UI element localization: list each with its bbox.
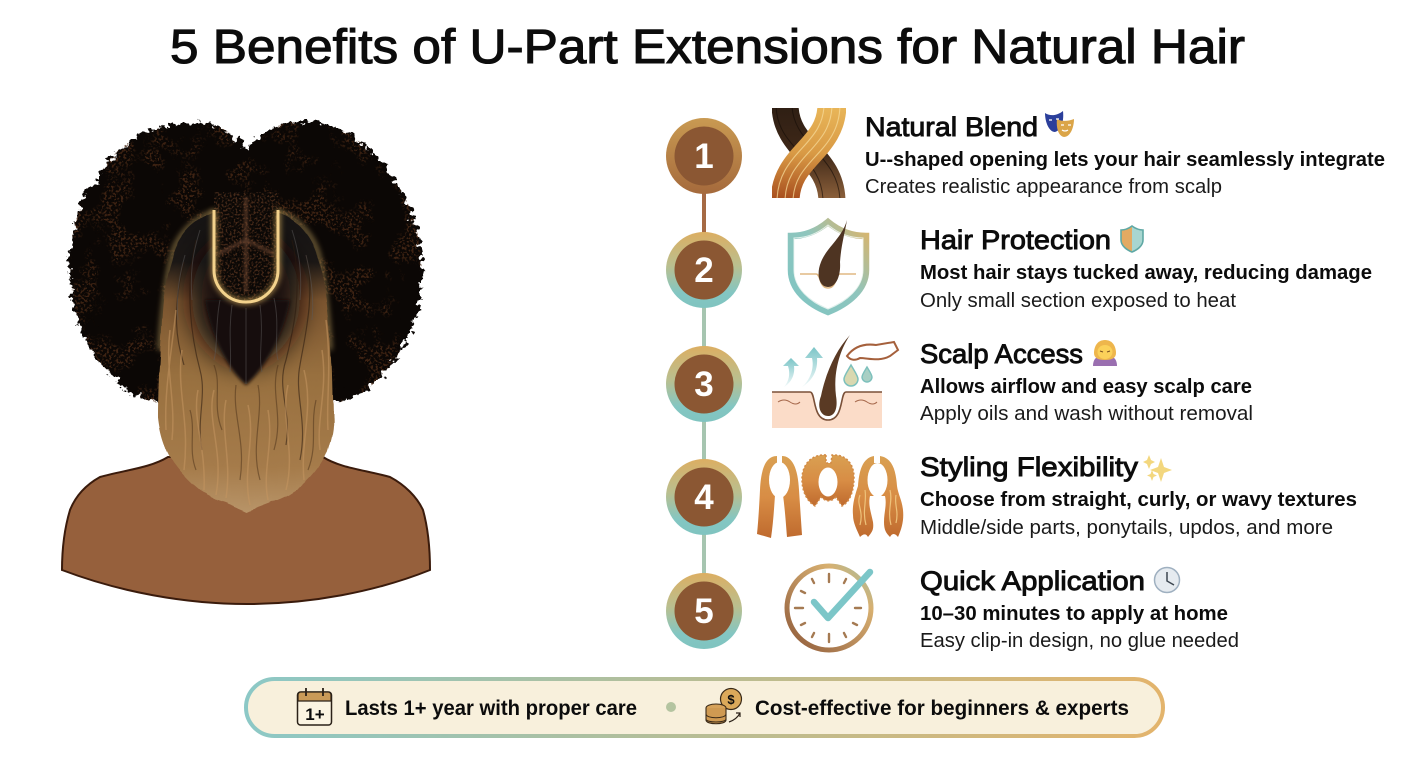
heading block 1: Natural Blend — [865, 112, 1038, 142]
icon: sparkles emoji — [1143, 455, 1172, 482]
heading block 3: Apply oils and wash without removal — [920, 403, 1253, 425]
heading block 4: Styling Flexibility — [920, 452, 1139, 482]
step number 1: 1 — [694, 137, 714, 176]
heading block 4 — [920, 452, 1357, 539]
icon: coins — [706, 688, 742, 724]
heading block 2: Hair Protection — [920, 225, 1111, 255]
glowing U outline — [214, 210, 278, 302]
heading block 5: 10–30 minutes to apply at home — [920, 603, 1228, 625]
step number 4: 4 — [694, 478, 714, 517]
title: 5 Benefits of U-Part Extensions for Natural Hair — [170, 21, 1245, 74]
icon: theatre masks emoji — [1045, 111, 1074, 137]
step number 5: 5 — [694, 592, 714, 631]
heading block 1: Creates realistic appearance from scalp — [865, 176, 1222, 198]
heading block 4: Middle/side parts, ponytails, updos, and more — [920, 517, 1333, 539]
icon: three hair textures — [757, 455, 903, 538]
step number 3: 3 — [694, 365, 714, 404]
heading block 3: Scalp Access — [920, 339, 1083, 369]
heading block 1 — [865, 112, 1385, 198]
heading block 5: Quick Application — [920, 566, 1145, 596]
icon: person emoji — [1093, 340, 1117, 366]
icon: calendar — [298, 688, 332, 725]
step number 2 — [666, 232, 742, 308]
step number 1 — [666, 118, 742, 194]
curly wig — [802, 455, 854, 506]
icon: shield protecting hair — [791, 220, 866, 312]
icon: calendar: 1+ — [305, 705, 325, 724]
step number 2: 2 — [694, 251, 714, 290]
icon: braided hair strands — [776, 104, 840, 202]
glow behind straight hair — [160, 212, 214, 350]
heading block 2: Most hair stays tucked away, reducing damage — [920, 262, 1372, 284]
shoulders — [62, 457, 430, 604]
heading block 1: U--shaped opening lets your hair seamlessly integrate — [865, 149, 1385, 171]
footer banner — [246, 679, 1163, 736]
heading block 2: Only small section exposed to heat — [920, 290, 1236, 312]
icon: clock with check mark — [787, 566, 871, 650]
heading block 3: Allows airflow and easy scalp care — [920, 376, 1252, 398]
separator dot — [666, 702, 676, 712]
timeline connectors — [702, 190, 706, 578]
heading block 5 — [920, 566, 1239, 652]
heading block 4: Choose from straight, curly, or wavy textures — [920, 489, 1357, 511]
icon: shield emoji — [1121, 226, 1143, 252]
heading block 5: Easy clip-in design, no glue needed — [920, 630, 1239, 652]
heading block 2 — [920, 225, 1372, 312]
icon: clock emoji — [1154, 568, 1180, 592]
step number 5 — [666, 573, 742, 649]
icon: coins: $ — [727, 692, 735, 707]
heading block 3 — [920, 339, 1253, 425]
straight extension hair — [158, 212, 333, 512]
text: cost: Cost-effective for beginners & experts — [755, 697, 1129, 720]
icon: scalp access, airflow and oil — [772, 335, 898, 428]
step number 3 — [666, 346, 742, 422]
afro hair — [60, 115, 430, 410]
step number 4 — [666, 459, 742, 535]
natural hair leave-out inside U — [214, 192, 278, 304]
straight wig — [757, 456, 802, 538]
wavy wig — [853, 456, 903, 537]
illustration: head from behind with U-part extension — [60, 115, 430, 604]
text: longevity: Lasts 1+ year with proper care — [345, 697, 637, 720]
